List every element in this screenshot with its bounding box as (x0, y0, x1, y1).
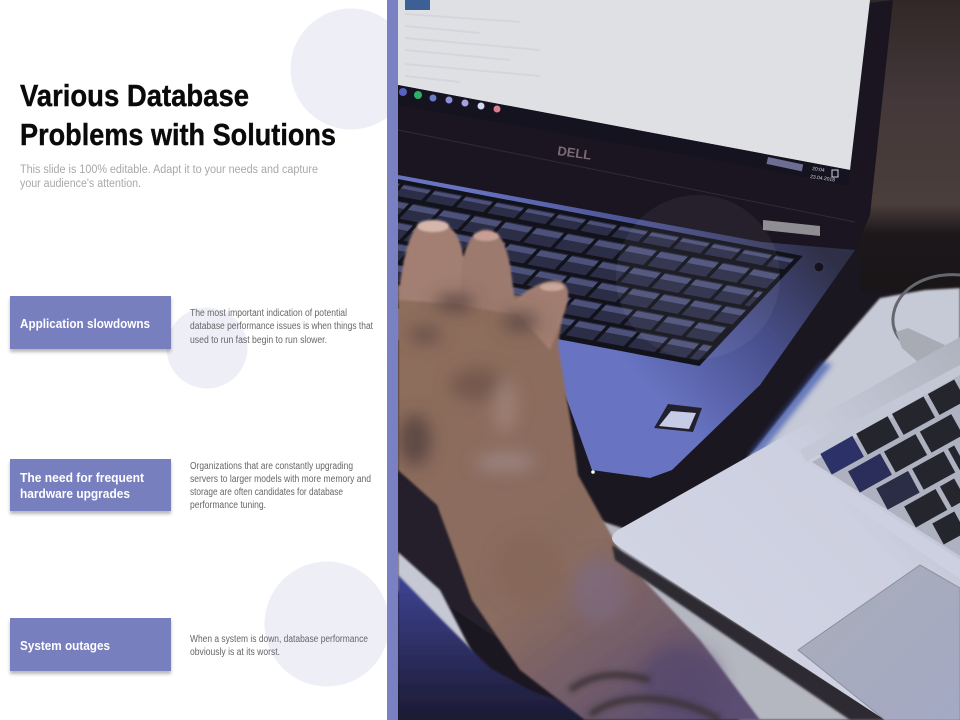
panel: system outages (10, 618, 368, 671)
hinge (763, 220, 820, 236)
subtitle: your audience's attention. (20, 178, 141, 190)
light cloth wedge (398, 551, 473, 652)
main laptop bezel (860, 0, 893, 230)
description: Organizations that are constantly upgrading (190, 461, 353, 472)
silver laptop trackpad (798, 565, 960, 720)
fingertip highlights (417, 220, 449, 232)
status light (591, 470, 595, 474)
silver laptop well mask (800, 462, 960, 579)
keyboard with keys (398, 179, 803, 366)
description: storage are often candidates for database (190, 487, 343, 498)
label text: hardware upgrades (20, 487, 130, 501)
panel: application slowdowns (10, 296, 373, 349)
decorative circles (166, 8, 412, 686)
middle finger (460, 230, 517, 315)
power button (814, 262, 824, 272)
screen thumbnail (405, 0, 430, 10)
wall background (864, 0, 960, 230)
label text (20, 471, 145, 501)
silver laptop well top mask (800, 365, 960, 462)
screen content lines (405, 14, 540, 82)
index finger (398, 226, 465, 302)
taskbar icons: 20:04 (812, 166, 825, 174)
silver laptop keys (826, 390, 960, 534)
keyboard well (398, 179, 803, 366)
taskbar icons (399, 88, 838, 183)
label text: Application slowdowns (20, 317, 150, 331)
thumb side finger (510, 281, 568, 350)
title: Various Database (20, 78, 249, 113)
title: Problems with Solutions (20, 117, 336, 152)
photo: hands on a laptop keyboard (398, 0, 960, 720)
label box (10, 459, 171, 511)
description: servers to larger models with more memory and (190, 474, 371, 485)
label box (10, 618, 171, 671)
sleeve (398, 574, 584, 720)
vertical accent strip (387, 0, 398, 720)
panel: hardware upgrades (10, 459, 371, 511)
translucent circle over keyboard (616, 195, 780, 359)
fingerprint reader (654, 404, 702, 432)
blue glow on the desk edge (748, 362, 832, 456)
silver laptop body (612, 337, 960, 720)
subtitle: This slide is 100% editable. Adapt it to your needs and capture (20, 164, 318, 176)
light desk surface (745, 288, 960, 460)
dark photo base (398, 175, 960, 720)
cable plug (896, 328, 945, 362)
description (190, 634, 368, 658)
forearm and hand (398, 220, 760, 720)
taskbar (398, 85, 850, 170)
silver laptop keyboard well (812, 380, 960, 556)
screen (398, 0, 870, 170)
description: obviously is at its worst. (190, 647, 280, 658)
description: The most important indication of potential (190, 308, 347, 319)
fingerprint reader inner (659, 411, 696, 429)
cable (893, 275, 960, 350)
bezel seam (398, 130, 855, 222)
description: When a system is down, database performance (190, 634, 368, 645)
description (190, 461, 371, 511)
label box (10, 296, 171, 349)
title (20, 78, 336, 152)
key rows (398, 183, 794, 360)
hand shading blotches (399, 295, 720, 714)
taskbar icons: 23.04.2018 (810, 174, 836, 183)
description: used to run fast begin to run slower. (190, 335, 327, 346)
subtitle (20, 164, 318, 190)
key highlights (398, 184, 794, 352)
dark gap beneath forearm (398, 472, 496, 636)
table under forearm (602, 520, 884, 720)
keyboard deck (398, 175, 855, 478)
tattoo shadow (570, 675, 720, 720)
description: database performance issues is when things that (190, 321, 373, 332)
description: performance tuning. (190, 500, 266, 511)
description (190, 308, 373, 346)
silver laptop shadow edge (612, 545, 890, 720)
label text: System outages (20, 639, 110, 653)
laptop brand: DELL (557, 143, 592, 163)
label text: The need for frequent (20, 471, 145, 485)
